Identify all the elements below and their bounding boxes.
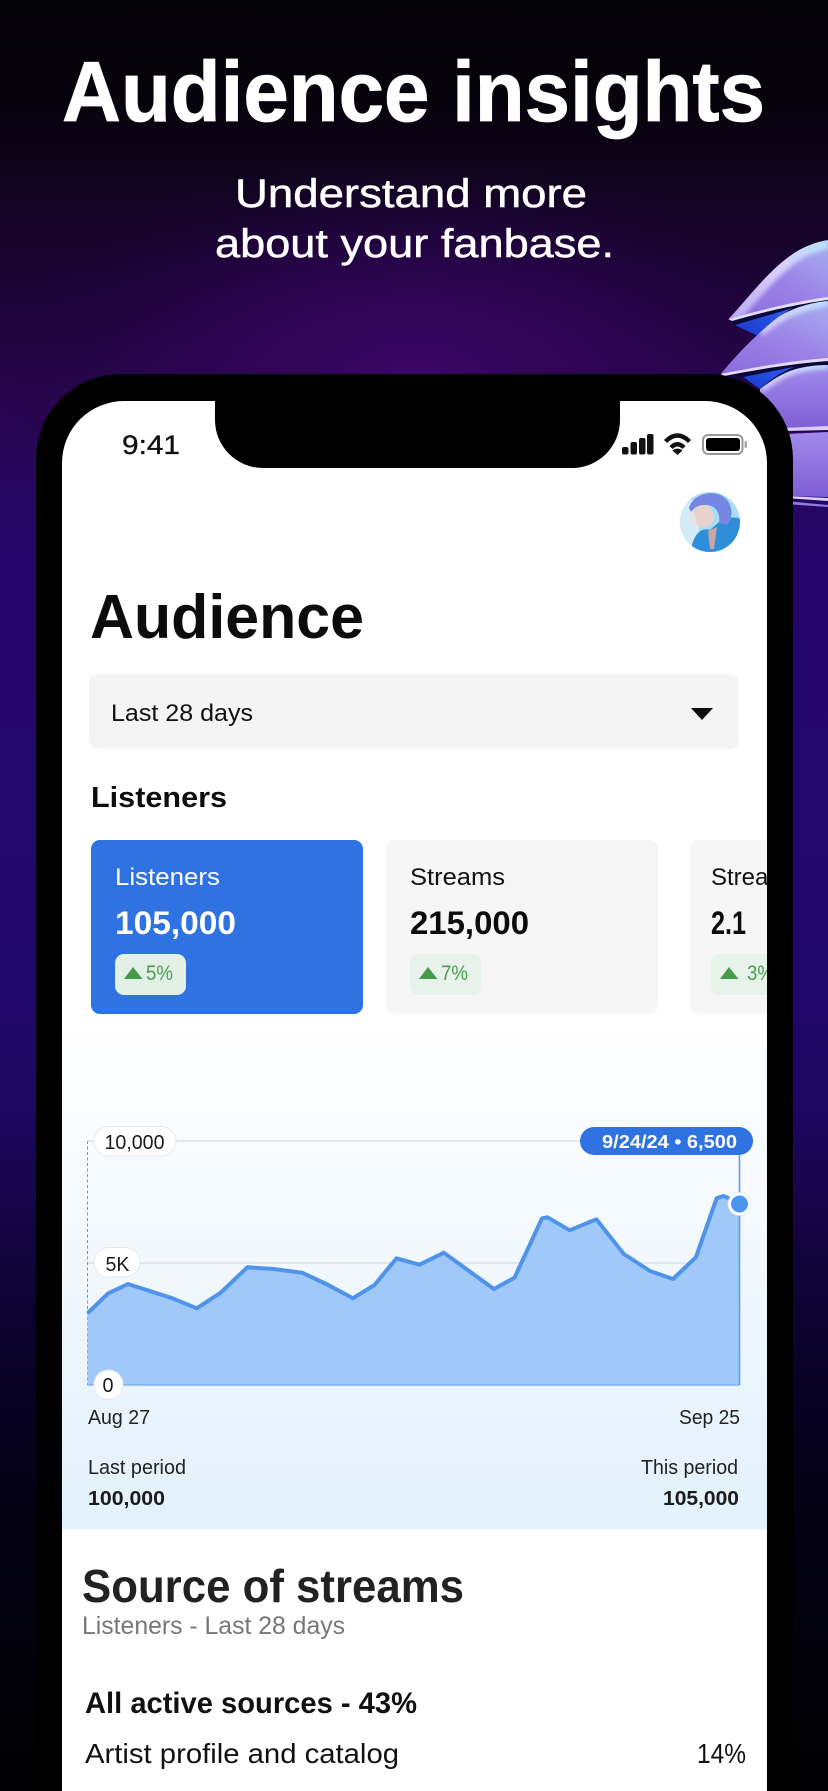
card: Streams: Streams [410, 864, 505, 891]
y label: 10,000 [94, 1126, 176, 1156]
y label: 0 [94, 1370, 123, 1400]
tier 3 [760, 365, 828, 431]
card: Streams per listener (cropped): 2.1 [711, 905, 746, 941]
heading: Audience: Audience [90, 583, 364, 652]
section heading: Source of streams [82, 1560, 464, 1612]
stat: this period: This period [641, 1457, 738, 1479]
badge: 3% [711, 954, 767, 995]
badge: 5%: 5% [146, 962, 173, 985]
avatar [680, 492, 740, 552]
row: artist profile and catalog [85, 1738, 746, 1769]
decorative 3D purple shape [721, 240, 828, 507]
y label: 5K [94, 1248, 140, 1277]
dropdown: date range [89, 674, 739, 749]
tooltip: selected date value [580, 1127, 753, 1155]
stat: last period: 100,000 [88, 1488, 165, 1510]
card: Listeners: Listeners [115, 864, 220, 891]
heading: Listeners: Listeners [91, 782, 227, 814]
y label: 10,000: 10,000 [104, 1132, 164, 1154]
tier 2 underside [724, 358, 828, 389]
chart line [88, 1196, 740, 1313]
group heading: All active sources - 43% [85, 1687, 417, 1720]
icon: dropdown arrow [691, 708, 713, 720]
stat: last period [88, 1457, 186, 1510]
icon: battery [703, 435, 747, 454]
icon: wifi [666, 436, 690, 455]
status icons [622, 434, 747, 455]
icon: signal bars [622, 434, 654, 454]
chart marker [728, 1192, 751, 1216]
stat: this period: 105,000 [663, 1488, 739, 1510]
x axis start date: Aug 27 [88, 1407, 150, 1429]
card: Streams: 215,000 [410, 905, 529, 941]
phone screen [62, 395, 828, 1791]
card: Listeners [91, 840, 363, 1014]
subtitle: about your fanbase. [215, 222, 614, 266]
tier 1 [728, 240, 828, 321]
stat: last period: Last period [88, 1457, 186, 1479]
badge: 5% [115, 954, 186, 995]
badge: 7%: 7% [441, 962, 468, 985]
x axis end date: Sep 25 [679, 1407, 740, 1429]
section subheading: Listeners - Last 28 days [82, 1612, 345, 1640]
chart area fill [88, 1196, 740, 1385]
badge: 7% [410, 954, 481, 995]
section: source of streams [83, 1568, 746, 1769]
stat: this period [641, 1457, 739, 1510]
area chart: listeners over time [88, 1126, 753, 1400]
card: Streams [386, 840, 658, 1014]
y label: 0: 0 [102, 1375, 114, 1397]
title: Audience insights [62, 45, 765, 140]
dropdown: date range: Last 28 days [111, 700, 253, 727]
subtitle: Understand more [235, 172, 587, 216]
tooltip: selected date value: 9/24/24 • 6,500 [602, 1131, 737, 1152]
tier 2 [721, 301, 828, 376]
row: artist profile and catalog: 14% [697, 1738, 746, 1769]
phone mockup [36, 374, 828, 1791]
notch [215, 395, 620, 468]
tier 1 underside [730, 297, 828, 336]
y label: 5K: 5K [106, 1254, 130, 1276]
row: artist profile and catalog: Artist profile and catalog [85, 1738, 399, 1769]
status bar time: 9:41 [122, 430, 180, 460]
badge: 3%: 3% [747, 962, 774, 985]
phone bezel [36, 374, 793, 1791]
subtitle [215, 172, 614, 266]
card: Streams per listener (cropped) [690, 840, 767, 1014]
card: Listeners: 105,000 [115, 905, 236, 941]
lower tiers [785, 432, 828, 507]
